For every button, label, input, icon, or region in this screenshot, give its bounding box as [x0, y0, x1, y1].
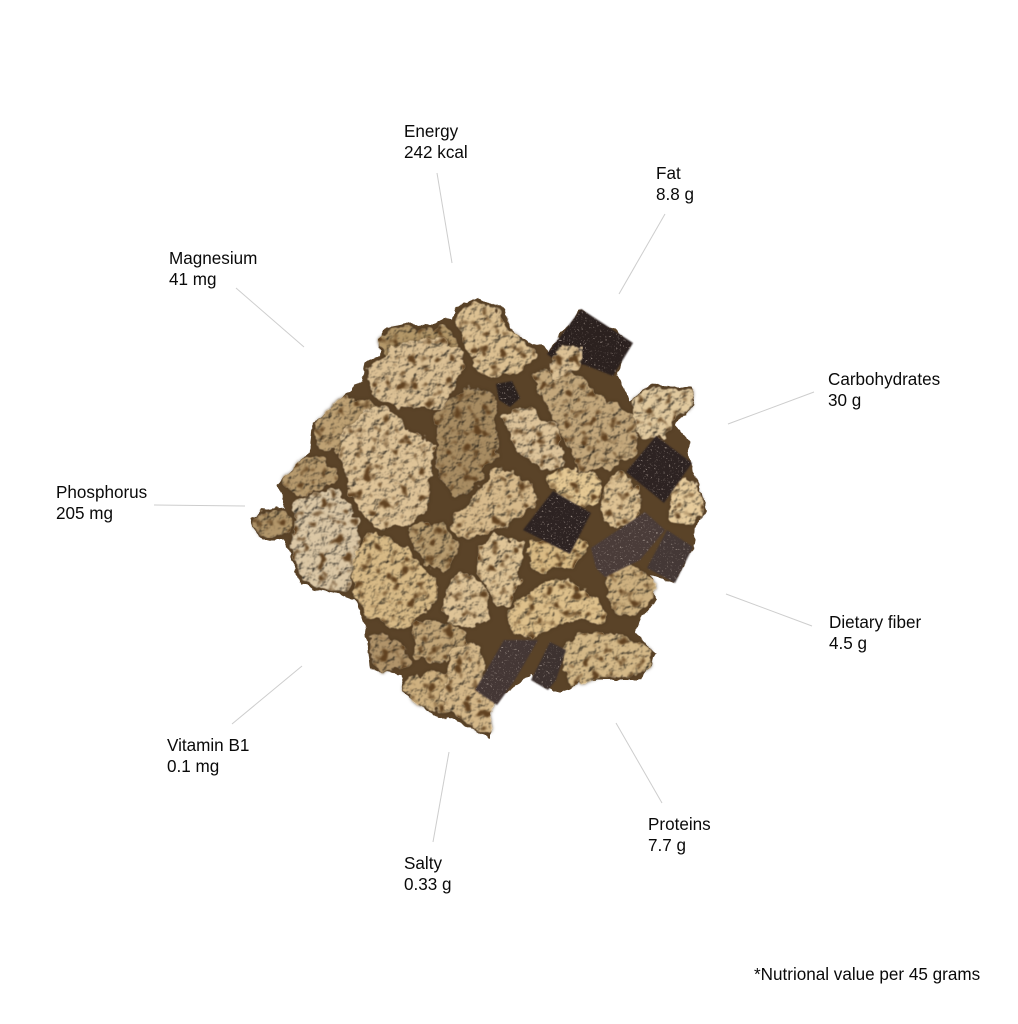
granola cluster photo [250, 298, 708, 738]
label: Dietary fiber [829, 613, 921, 653]
label: Fat: 8.8 g [656, 185, 694, 204]
label: Vitamin B1: Vitamin B1 [167, 736, 249, 755]
label: Magnesium: 41 mg [169, 270, 217, 289]
label: Carbohydrates [828, 370, 940, 410]
label: Dietary fiber: Dietary fiber [829, 613, 921, 632]
leader line: Salty [433, 752, 449, 842]
label: Salty: Salty [404, 854, 442, 873]
label: Energy: 242 kcal [404, 143, 468, 162]
label: Carbohydrates: Carbohydrates [828, 370, 940, 389]
label: Energy [404, 122, 468, 162]
label: Proteins: Proteins [648, 815, 711, 834]
leader line: Fat [619, 214, 665, 294]
label: Magnesium: Magnesium [169, 249, 257, 268]
label: Fat [656, 164, 694, 204]
label: Phosphorus: 205 mg [56, 504, 113, 523]
label: Vitamin B1: 0.1 mg [167, 757, 219, 776]
label: Fat: Fat [656, 164, 681, 183]
label: Proteins [648, 815, 711, 855]
label: Vitamin B1 [167, 736, 249, 776]
label: Energy: Energy [404, 122, 459, 141]
label: Salty [404, 854, 452, 894]
granola clusters [260, 306, 700, 726]
leader line: Vitamin B1 [232, 666, 302, 724]
leader line: Dietary fiber [726, 594, 812, 626]
oat pieces on top of chocolate [556, 350, 576, 372]
leader line: Proteins [616, 723, 662, 803]
chocolate pieces [475, 309, 693, 705]
label: Magnesium [169, 249, 257, 289]
leader line: Energy [437, 173, 452, 263]
leader line: Magnesium [236, 288, 304, 347]
label: Dietary fiber: 4.5 g [829, 634, 867, 653]
leader line: Carbohydrates [728, 392, 814, 424]
footnote: *Nutrional value per 45 grams [754, 965, 980, 984]
label: Salty: 0.33 g [404, 875, 452, 894]
label: Phosphorus [56, 483, 147, 523]
granola base shadow mass [250, 298, 708, 738]
label: Carbohydrates: 30 g [828, 391, 861, 410]
leader line: Phosphorus [154, 505, 245, 506]
label: Proteins: 7.7 g [648, 836, 686, 855]
label: Phosphorus: Phosphorus [56, 483, 147, 502]
